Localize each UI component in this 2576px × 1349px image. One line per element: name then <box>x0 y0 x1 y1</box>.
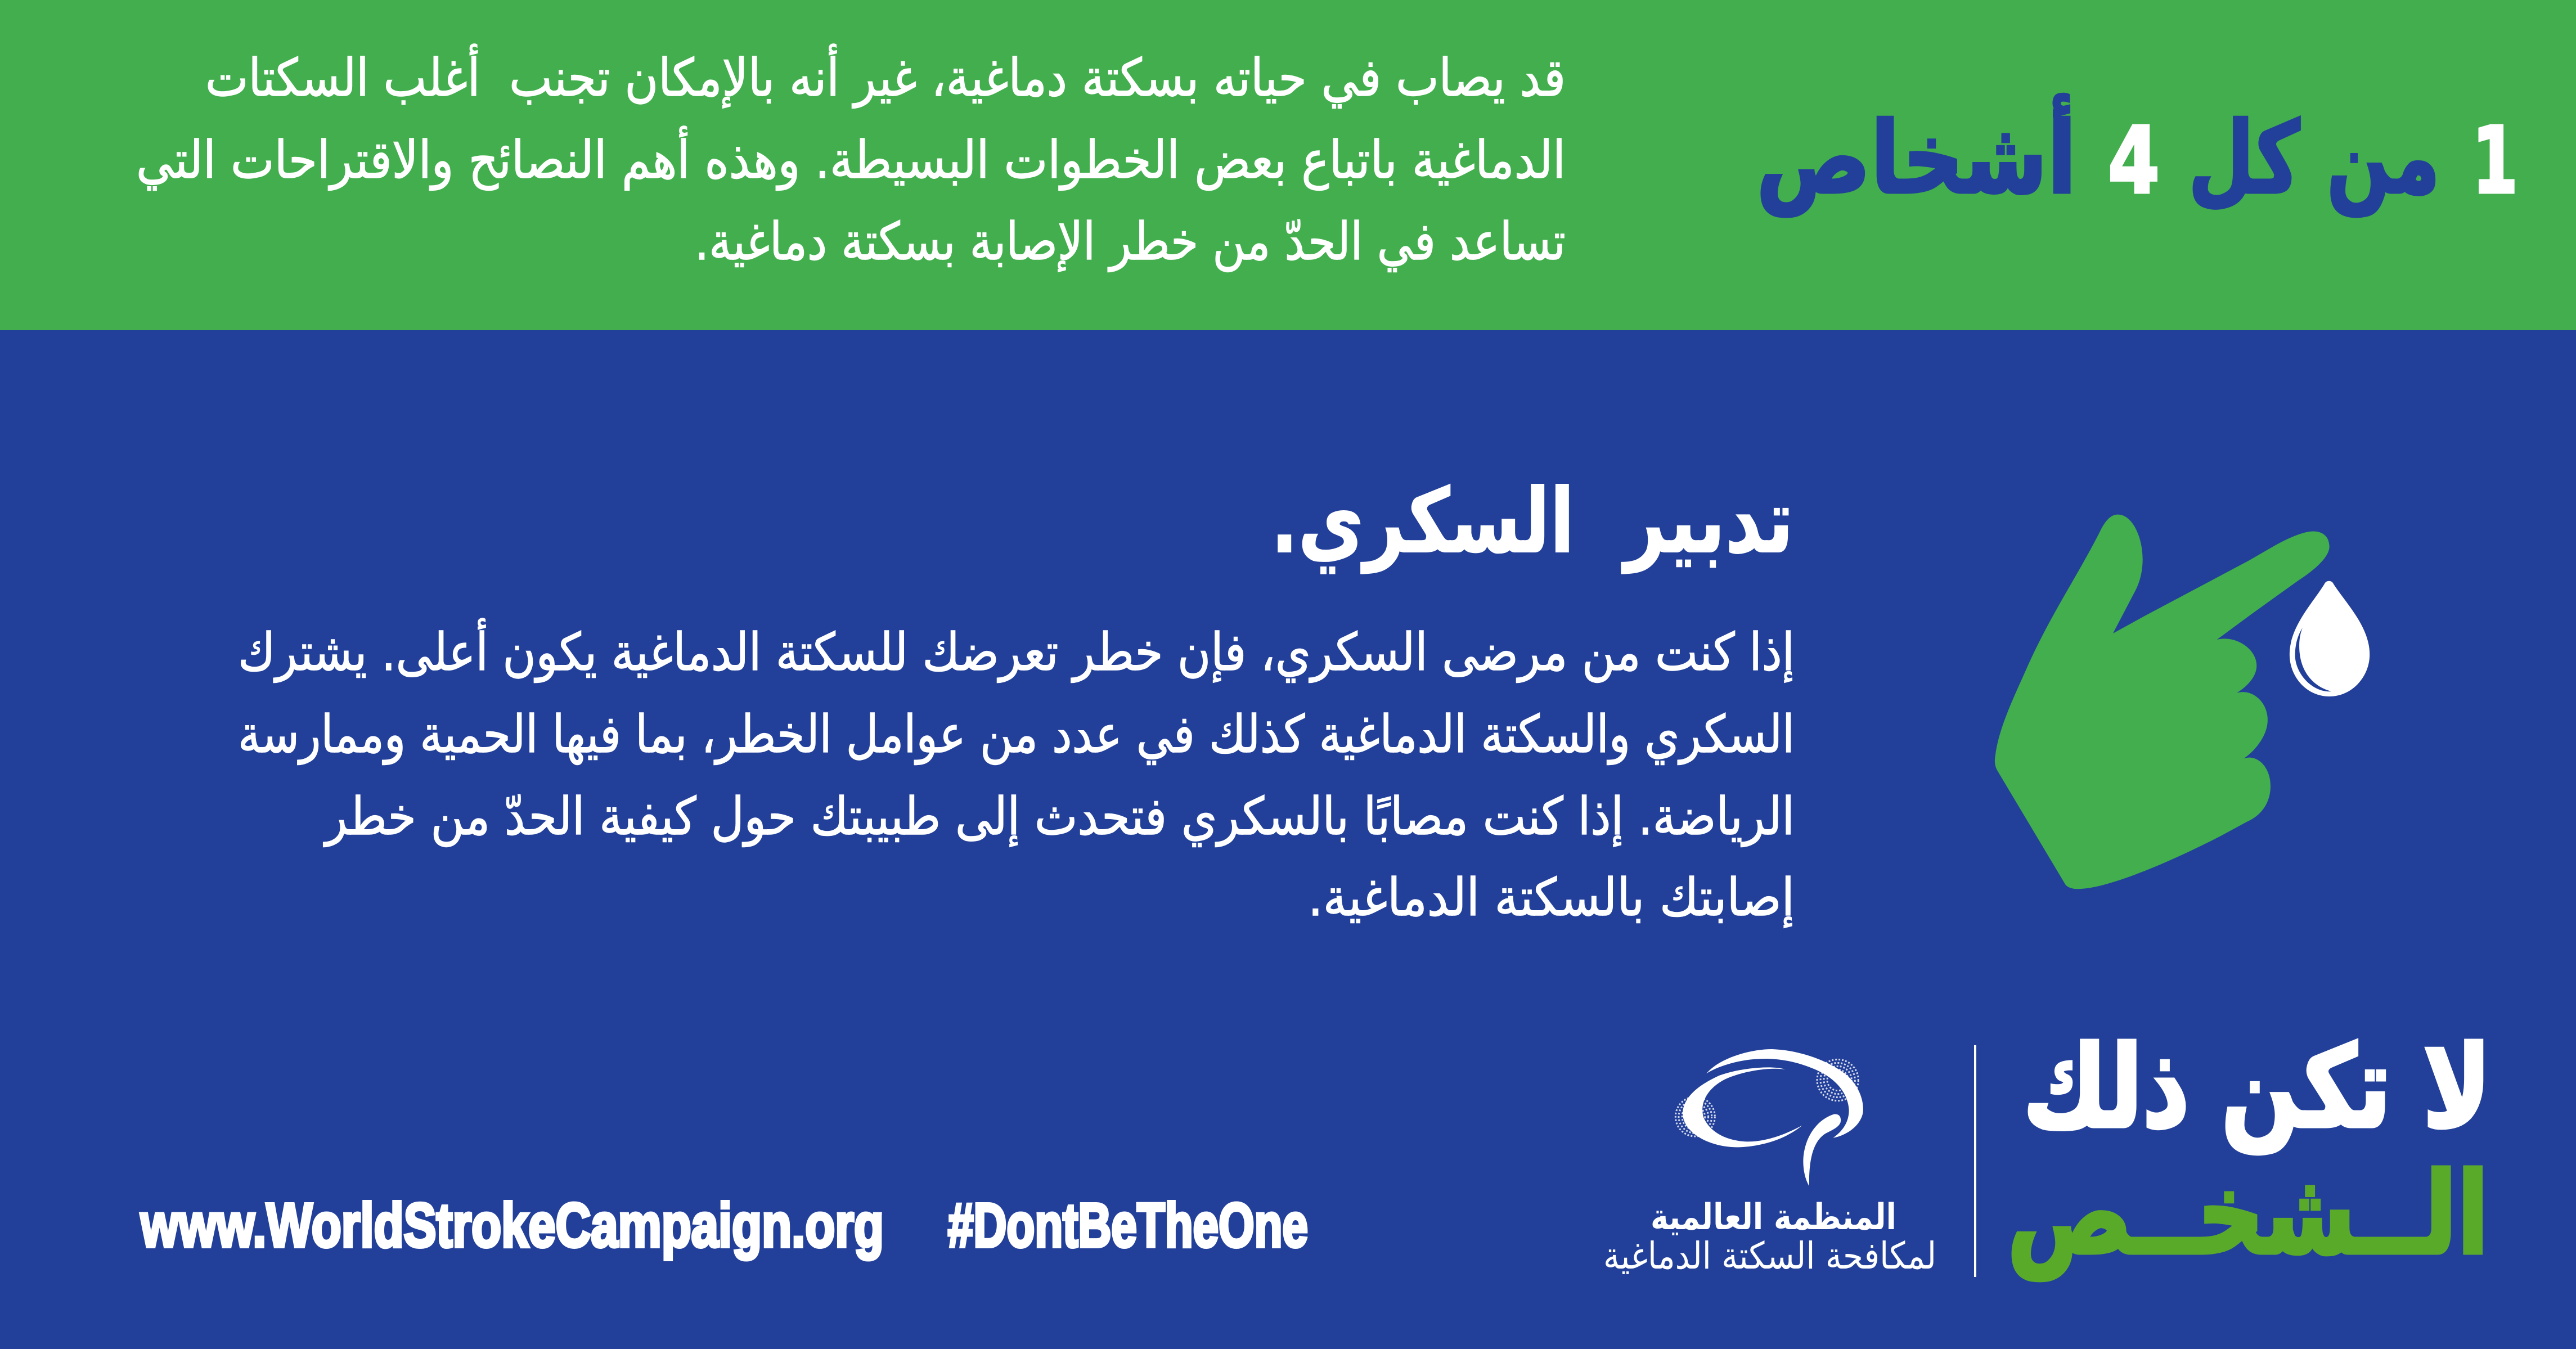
text block: intro paragraph: تساعد في الحدّ من خطر الإصابة بسكتة دماغية. <box>695 212 1566 272</box>
text block: diabetes paragraph: الرياضة. إذا كنت مصابًا بالسكري فتحدث إلى طبيبتك حول كيفية الحدّ من خطر <box>323 786 1795 847</box>
text block: diabetes paragraph: السكري والسكتة الدماغية كذلك في عدد من عوامل الخطر، بما فيها الحمية وممارسة <box>238 704 1795 765</box>
icon: green hand <box>1995 515 2330 889</box>
icon: white drop <box>2290 581 2370 696</box>
icon: drop highlight <box>2295 628 2331 691</box>
text block: intro paragraph <box>136 44 1566 272</box>
text block: organization name: المنظمة العالمية <box>1651 1197 1896 1238</box>
heading: diabetes management: تدبير السكري. <box>1271 470 1793 574</box>
text block: intro paragraph: قد يصاب في حياته بسكتة دماغية، غير أنه بالإمكان تجنب أغلب السكتات <box>205 44 1566 109</box>
heading: 1 in 4 people: أشخاص <box>1756 94 2076 217</box>
text block: organization name: لمكافحة السكتة الدماغية <box>1603 1234 1936 1278</box>
slogan: don't be that person: الــشخــص <box>2007 1149 2489 1280</box>
text block: organization name <box>1603 1197 1936 1278</box>
heading: 1 in 4 people: 1 <box>2472 108 2518 214</box>
text block: diabetes paragraph <box>238 618 1795 928</box>
heading: 1 in 4 people: من <box>2327 101 2440 217</box>
logo texture <box>1675 1059 1858 1136</box>
hashtag: #DontBeTheOne <box>948 1191 1308 1260</box>
panel: green header band <box>0 0 2576 330</box>
divider line <box>1974 1045 1976 1277</box>
heading: 1 in 4 people: 4 <box>2108 108 2160 214</box>
icon: world stroke organization logo <box>1675 1049 1863 1186</box>
heading: 1 in 4 people <box>1756 94 2518 217</box>
text block: intro paragraph: الدماغية باتباع بعض الخطوات البسيطة. وهذه أهم النصائح والاقتراحات التي <box>136 126 1566 191</box>
heading: 1 in 4 people: كل <box>2188 101 2300 216</box>
text block: diabetes paragraph: إذا كنت من مرضى السكري، فإن خطر تعرضك للسكتة الدماغية يكون أعلى. يشترك <box>238 618 1795 683</box>
link: campaign url: www.WorldStrokeCampaign.org <box>140 1191 884 1260</box>
slogan: don't be that person <box>2007 1022 2491 1280</box>
text block: diabetes paragraph: إصابتك بالسكتة الدماغية. <box>1308 867 1795 928</box>
icon: hand pointing at a drop of blood <box>1995 515 2370 889</box>
